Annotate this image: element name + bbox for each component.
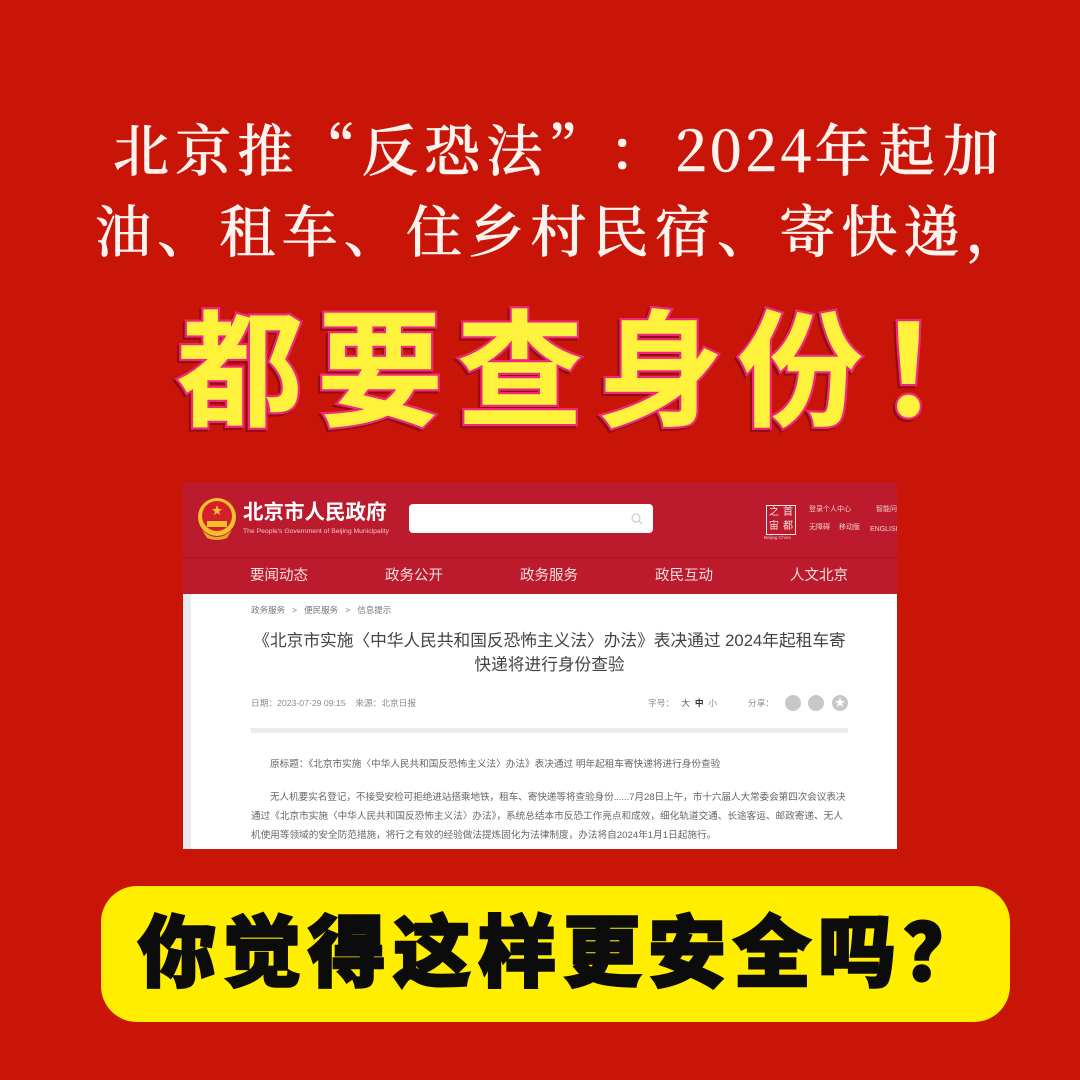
font size controls: 字号： 大 中 小 [648, 698, 717, 708]
article date and source: 日期：2023-07-29 09:15 来源：北京日报 [251, 698, 416, 708]
question text: 你觉得这样更安全吗？ [138, 891, 988, 1003]
original title paragraph: 原标题：《北京市实施〈中华人民共和国反恐怖主义法〉办法》表决通过 明年起租车寄快递将进行身份查验 [270, 759, 720, 770]
header links: 登录个人中心 [809, 506, 851, 513]
nav divider [183, 557, 897, 558]
article body paragraph: 无人机要实名登记，不接受安检可拒绝进站搭乘地铁，租车、寄快递等将查验身份......7月28日上午，市十六届人大常委会第四次会议表决 [270, 792, 845, 803]
nav: news: 要闻动态 [250, 568, 308, 584]
icon: share weibo [808, 695, 824, 711]
article divider [251, 728, 848, 733]
logo caption: Beijing·China [764, 535, 791, 540]
icon: capital logo: 之 [769, 507, 779, 518]
icon: capital logo [766, 505, 796, 535]
article headline: 快递将进行身份查验 [474, 655, 625, 674]
article headline: 《北京市实施〈中华人民共和国反恐怖主义法〉办法》表决通过 2024年起租车寄 [253, 631, 846, 650]
nav: culture: 人文北京 [790, 568, 848, 584]
headline: must check ID: 都要查身份！ [177, 271, 1017, 453]
icon: capital logo: 宙 [769, 521, 779, 532]
headline: must check ID: 都要查身份！ [177, 271, 1017, 453]
nav: services: 政务服务 [520, 568, 578, 584]
share label: 分享： [748, 698, 774, 708]
icon: share favourite [832, 695, 848, 711]
nav: interaction: 政民互动 [655, 568, 713, 584]
icon: national emblem [198, 498, 236, 540]
article body paragraph: 通过《北京市实施〈中华人民共和国反恐怖主义法〉办法》，系统总结本市反恐工作亮点和成效，细化轨道交通、长途客运、邮政寄递、无人 [251, 811, 843, 822]
icon: share favourite: ★ [834, 697, 846, 709]
breadcrumb: 政务服务 > 便民服务 > 信息提示 [251, 605, 391, 615]
panel: Beijing government webpage screenshot [183, 482, 897, 849]
article headline [253, 631, 846, 674]
article body paragraph [251, 792, 846, 841]
site English name: The People's Government of Beijing Municipality [243, 528, 389, 535]
search box [409, 504, 653, 533]
icon: search [632, 513, 642, 524]
header links [809, 505, 897, 533]
title line 1: 北京推“反恐法” ：2024年起加 [113, 108, 1007, 188]
nav: open government: 政务公开 [385, 568, 443, 584]
left margin strip [183, 594, 191, 849]
header links: 无障碍 [809, 524, 830, 531]
article body paragraph: 机使用等领域的安全防范措施，将行之有效的经验做法提炼固化为法律制度，办法将自2024年1月1日起施行。 [251, 830, 716, 841]
icon: capital logo: 都 [783, 521, 793, 532]
icon: capital logo: 首 [783, 507, 793, 518]
callout: yellow question banner [101, 886, 1010, 1022]
icon: share wechat [785, 695, 801, 711]
site name: 北京市人民政府 [243, 501, 386, 524]
title line 2: 油、租车、住乡村民宿、寄快递， [95, 189, 1028, 269]
site header band [183, 482, 897, 594]
headline: must check ID: 都要查身份！ [175, 273, 1015, 455]
header links: 移动版 [839, 524, 860, 531]
